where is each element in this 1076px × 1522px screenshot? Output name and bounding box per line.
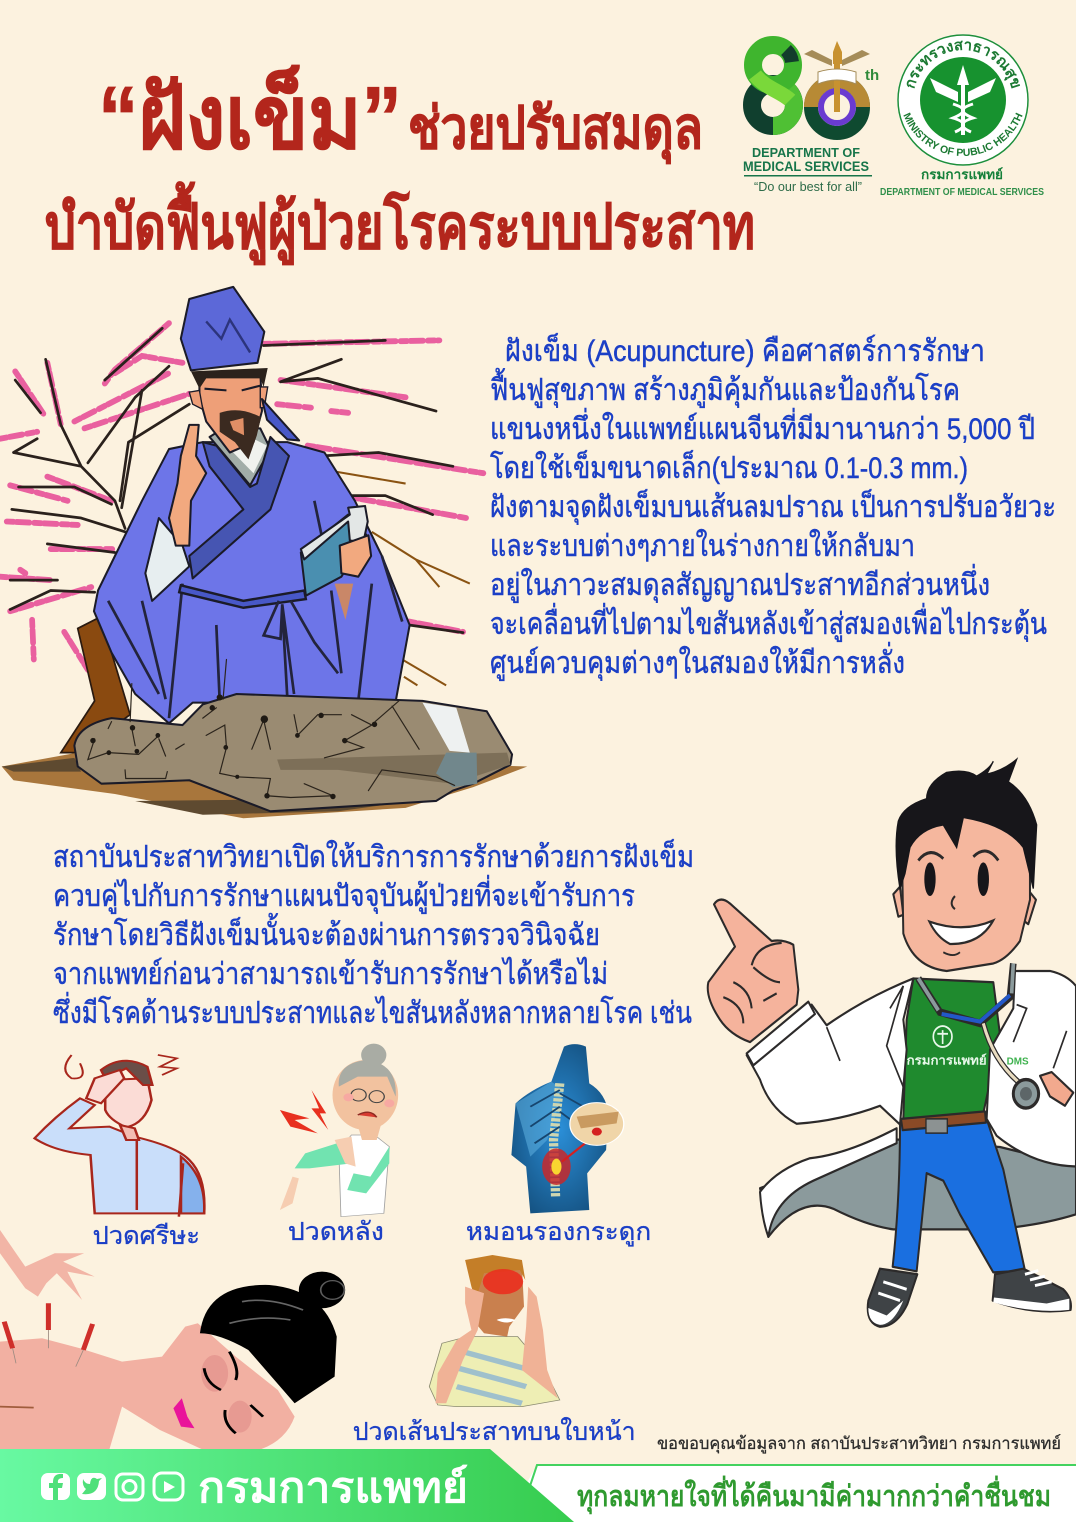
- paragraph: what is acupuncture: โดยใช้เข็มขนาดเล็ก(ประมาณ 0.1-0.3 mm.): [490, 449, 968, 485]
- title: บำบัดฟื้นฟูผู้ป่วยโรคระบบประสาท: [45, 181, 755, 265]
- logo: Ministry of Public Health seal: กรมการแพทย์: [921, 167, 1003, 182]
- tree trunk: [61, 616, 130, 753]
- paragraph: institute services: ซึ่งมีโรคด้านระบบประสาทและไขสันหลังหลากหลายโรค เช่น: [53, 992, 692, 1030]
- right shoe: [993, 1269, 1071, 1311]
- text: label herniated disc: หมอนรองกระดูก: [466, 1218, 651, 1247]
- paragraph: what is acupuncture: และระบบต่างๆภายในร่างกายให้กลับมา: [490, 529, 915, 563]
- hair: [896, 759, 1037, 889]
- text: label back pain: ปวดหลัง: [288, 1218, 384, 1246]
- icon: spine with herniated disc: [511, 1044, 624, 1213]
- title: “ฝังเข็ม”: [98, 64, 402, 167]
- text: label facial nerve pain: ปวดเส้นประสาทบนใบหน้า: [353, 1417, 636, 1446]
- logo: Ministry of Public Health seal: กระทรวงสาธารณสุข: [906, 40, 1020, 88]
- illustration: doctor mascot: กรมการแพทย์: [907, 1053, 987, 1068]
- title: ช่วยปรับสมดุล: [408, 96, 703, 165]
- paragraph: what is acupuncture: ฝังเข็ม (Acupuncture) คือศาสตร์การรักษา: [505, 332, 985, 368]
- smile: [929, 920, 993, 944]
- raised arm and hand: [169, 425, 206, 546]
- icon: twitter: [77, 1473, 106, 1500]
- logo: Department of Medical Services 80th: “Do our best for all”: [754, 179, 862, 194]
- paragraph: what is acupuncture: ศูนย์ควบคุมต่างๆในสมองให้มีการหลั่ง: [490, 642, 905, 682]
- logo: Ministry of Public Health seal: MINISTRY OF PUBLIC HEALTH: [904, 112, 1022, 156]
- face: [199, 370, 262, 452]
- icon: instagram: [116, 1474, 143, 1500]
- title: [45, 64, 755, 265]
- paragraph: institute services: รักษาโดยวิธีฝังเข็มนั้นจะต้องผ่านการตรวจวินิจฉัย: [53, 913, 600, 952]
- stethoscope: [918, 963, 1013, 1023]
- text: credit: ขอขอบคุณข้อมูลจาก สถาบันประสาทวิทยา กรมการแพทย์: [657, 1434, 1061, 1454]
- paragraph: institute services: สถาบันประสาทวิทยาเปิดให้บริการการรักษาด้วยการฝังเข็ม: [53, 838, 694, 874]
- paragraph: what is acupuncture: ฟื้นฟูสุขภาพ สร้างภูมิคุ้มกันและป้องกันโรค: [490, 368, 960, 409]
- logo: Department of Medical Services 80th: MEDICAL SERVICES: [743, 158, 869, 174]
- hat: [181, 287, 264, 370]
- paragraph: what is acupuncture: อยู่ในภาวะสมดุลสัญญาณประสาทอีกส่วนหนึ่ง: [490, 564, 990, 604]
- icon: man with facial nerve pain: [429, 1255, 560, 1407]
- jeans: [893, 1119, 1025, 1272]
- paragraph: institute services: จากแพทย์ก่อนว่าสามารถเข้ารับการรักษาได้หรือไม่: [53, 956, 608, 991]
- robe: [94, 442, 410, 723]
- footer band: green with social icons and department name: [0, 1449, 574, 1522]
- icon: headache man: [35, 1055, 204, 1217]
- illustrations and labels: symptoms: [0, 1044, 651, 1449]
- text: label migraine: ปวดศรีษะ: [93, 1222, 200, 1250]
- logo: Department of Medical Services 80th: [743, 41, 879, 194]
- logo: Department of Medical Services 80th: DEPARTMENT OF: [752, 145, 860, 160]
- ears: [893, 887, 1036, 924]
- paragraph: institute services: [53, 838, 694, 1030]
- belt: [179, 585, 306, 608]
- collar: [189, 437, 289, 578]
- paragraph: what is acupuncture: [490, 332, 1056, 682]
- footer panel: slogan: [525, 1465, 1076, 1522]
- head: [902, 812, 1030, 971]
- logo: Department of Medical Services 80th: th: [865, 67, 879, 84]
- illustration: woman receiving acupuncture: [0, 1230, 345, 1449]
- illustration: doctor mascot: DMS: [1007, 1056, 1029, 1067]
- shirt: [903, 978, 1000, 1119]
- illustration: sage with acupuncture figure and blossom tree: [0, 287, 527, 818]
- undershirt and sleeve: [210, 428, 270, 485]
- ground: [2, 753, 527, 818]
- eyes: [924, 862, 936, 896]
- illustration: doctor mascot: [708, 759, 1076, 1327]
- logo: Ministry of Public Health seal: DEPARTMENT OF MEDICAL SERVICES: [880, 187, 1044, 198]
- needles: [88, 660, 455, 798]
- icon: elderly woman with back pain: [280, 1044, 398, 1217]
- right hand on hip: [1040, 1072, 1073, 1106]
- belt: [901, 1111, 986, 1130]
- stone acupuncture figure: [74, 694, 512, 811]
- left shoe: [868, 1269, 917, 1327]
- beard: [220, 410, 261, 459]
- paragraph: institute services: ควบคู่ไปกับการรักษาแผนปัจจุบันผู้ป่วยที่จะเข้ารับการ: [53, 875, 635, 915]
- book: [301, 515, 367, 596]
- icon: facebook: [41, 1473, 70, 1500]
- logo: Ministry of Public Health seal: [880, 34, 1044, 198]
- pointing hand: [708, 900, 798, 1042]
- cape: [760, 1139, 1076, 1237]
- text: department name: กรมการแพทย์: [198, 1464, 468, 1511]
- icon: youtube: [154, 1473, 183, 1500]
- lab coat: [747, 978, 913, 1124]
